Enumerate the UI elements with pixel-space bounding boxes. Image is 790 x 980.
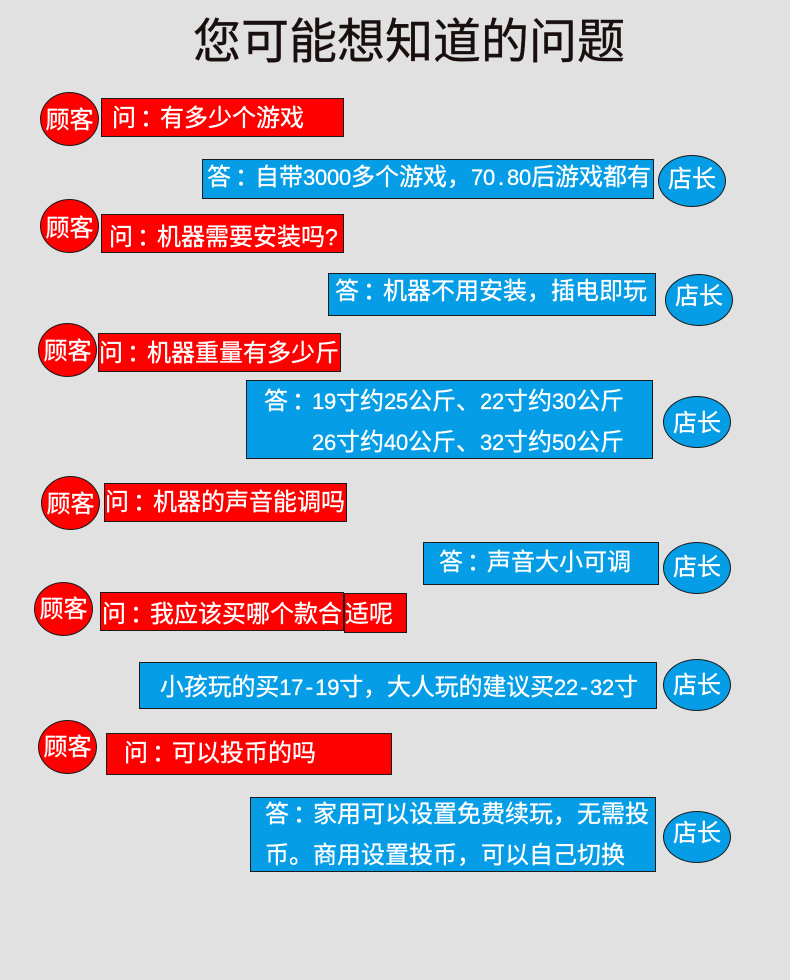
shopkeeper avatar 3: 店长: [673, 403, 721, 438]
answer 3: [246, 380, 653, 459]
title: 您可能想知道的问题: [193, 2, 625, 72]
shopkeeper avatar 4: 店长: [673, 547, 721, 582]
question 2: ：: [137, 217, 161, 252]
answer 3: ：: [292, 381, 316, 416]
question 5 overflow: 适呢: [345, 594, 393, 629]
answer 6: [250, 797, 656, 872]
question 3: ：: [127, 333, 151, 368]
shopkeeper avatar 3: [663, 396, 731, 448]
answer 5: -: [580, 674, 588, 700]
question 6: [106, 733, 392, 775]
customer avatar 6: [38, 720, 97, 774]
customer avatar 5: [34, 582, 93, 636]
customer avatar 5: 顾客: [40, 589, 88, 624]
shopkeeper avatar 6: [663, 811, 731, 863]
question 3: 问 机器重量有多少斤: [99, 333, 339, 368]
answer 4: ：: [467, 542, 491, 577]
customer avatar 3: 顾客: [44, 331, 92, 366]
question 6: 问 可以投币的吗: [124, 733, 316, 768]
question 1: 问 有多少个游戏: [112, 98, 304, 133]
question 5: 问 我应该买哪个款合: [102, 594, 342, 629]
question 4: ：: [133, 483, 157, 517]
question 5 overflow: [344, 593, 407, 633]
answer 5: 小孩玩的买17 19寸，大人玩的建议买22 32寸: [160, 667, 638, 702]
answer 5: [139, 662, 657, 709]
answer 6: 币。商用设置投币，可以自己切换: [265, 835, 625, 870]
customer avatar 3: [38, 323, 97, 377]
shopkeeper avatar 1: 店长: [668, 159, 716, 194]
customer avatar 6: 顾客: [44, 727, 92, 762]
shopkeeper avatar 5: 店长: [673, 665, 721, 700]
answer 5: -: [306, 674, 313, 700]
shopkeeper avatar 2: 店长: [675, 276, 723, 311]
answer 4: 答 声音大小可调: [439, 542, 631, 577]
customer avatar 1: 顾客: [46, 100, 94, 135]
shopkeeper avatar 1: [658, 155, 726, 207]
question 4: 问 机器的声音能调吗: [105, 483, 345, 517]
customer avatar 2: [40, 199, 99, 253]
question 2: ?: [325, 224, 338, 250]
customer avatar 4: 顾客: [46, 484, 94, 519]
shopkeeper avatar 2: [665, 274, 733, 326]
question 2: 问 机器需要安装吗: [109, 217, 325, 252]
answer 3: 答 19寸约25公斤、22寸约30公斤: [264, 381, 624, 416]
customer avatar 2: 顾客: [46, 208, 94, 243]
customer avatar 1: [40, 92, 99, 146]
answer 1: .: [498, 164, 504, 190]
question 5: ：: [130, 594, 154, 629]
answer 4: [423, 542, 659, 585]
shopkeeper avatar 4: [663, 542, 731, 594]
answer 3: 26寸约40公斤、32寸约50公斤: [312, 422, 624, 457]
customer avatar 4: [41, 476, 100, 530]
question 6: ：: [152, 733, 176, 768]
shopkeeper avatar 6: 店长: [673, 813, 721, 848]
shopkeeper avatar 5: [663, 659, 731, 711]
question 1: ：: [140, 98, 164, 133]
